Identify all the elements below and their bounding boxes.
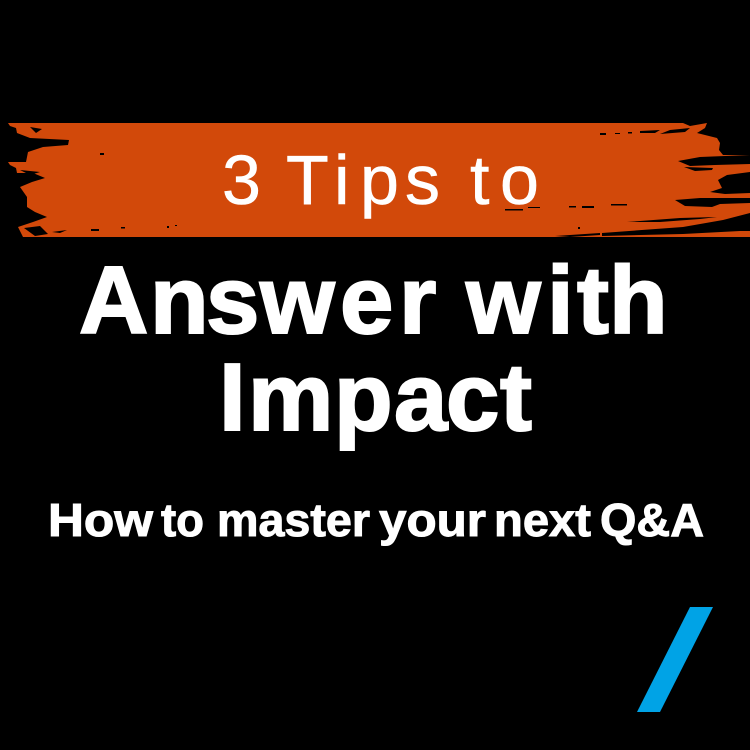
- subtitle: master: [217, 494, 370, 546]
- main title: Impact: [219, 344, 532, 451]
- subtitle: Q&A: [600, 494, 704, 546]
- orange brush stroke banner: [8, 123, 750, 237]
- banner heading: 3 Tips to: [222, 141, 539, 219]
- main title: Answer with: [79, 247, 668, 354]
- subtitle: to: [161, 494, 204, 546]
- main title: [79, 247, 668, 451]
- icon: blue slash logo: [637, 607, 713, 712]
- subtitle: your: [379, 494, 486, 546]
- subtitle: How: [48, 494, 153, 546]
- subtitle: next: [494, 494, 591, 546]
